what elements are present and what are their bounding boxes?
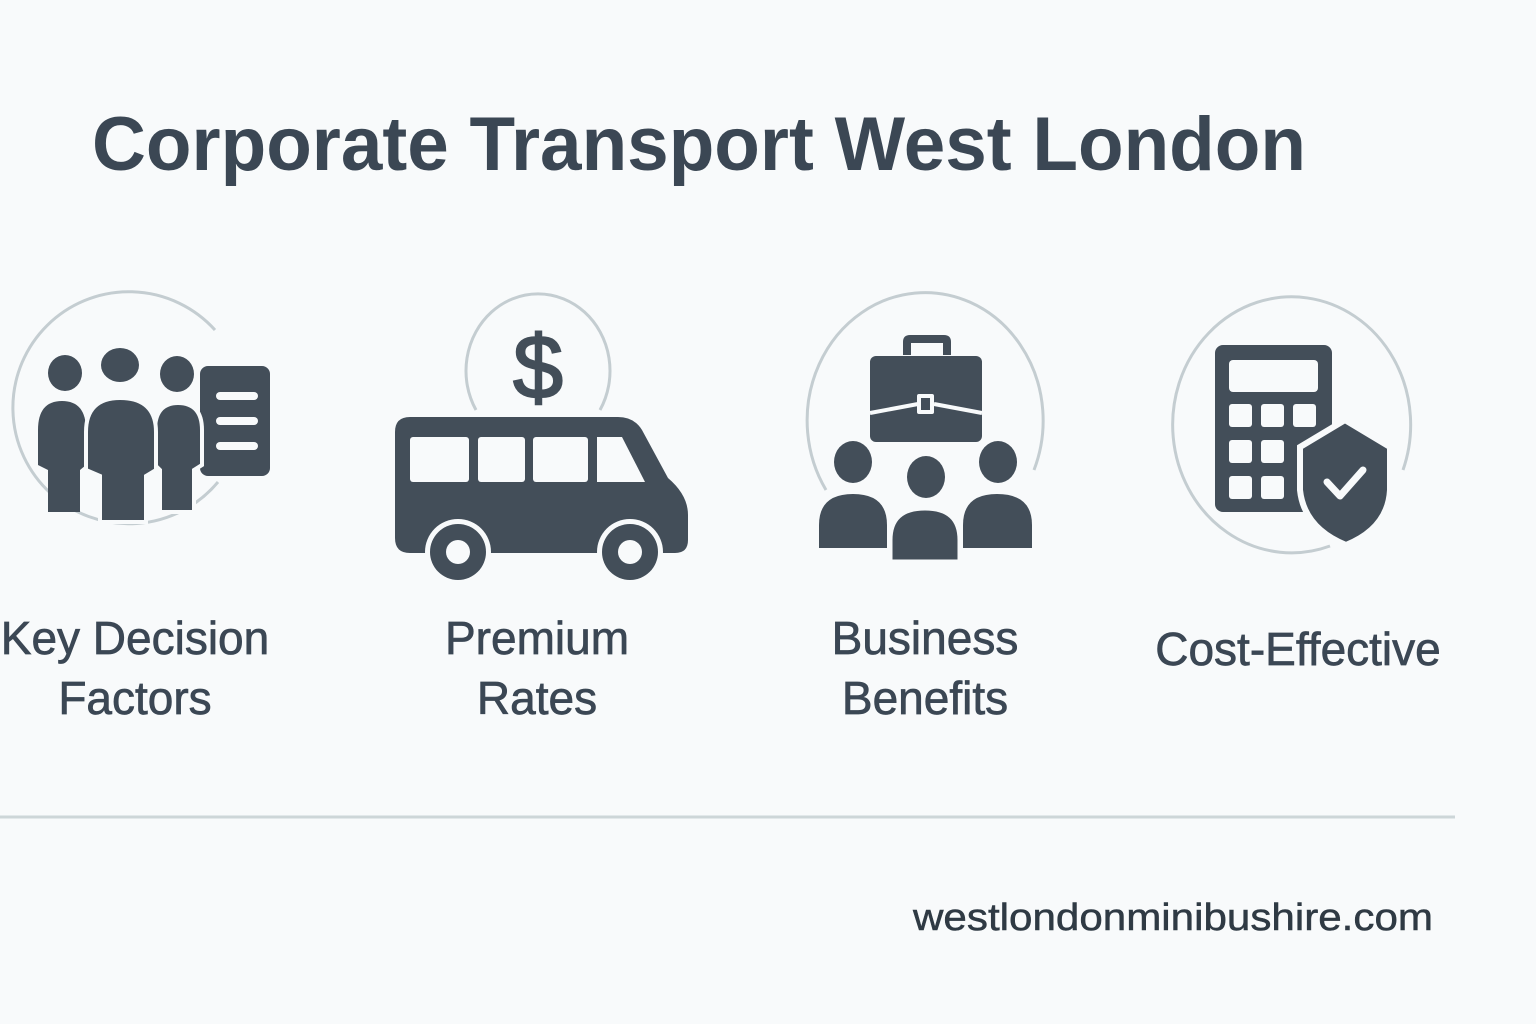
panel: cost-effective (1155, 297, 1441, 675)
label: business benefits: Business (832, 612, 1018, 664)
icon: briefcase with people (807, 293, 1043, 562)
icon: van with dollar: $ (513, 318, 563, 418)
label: key decision factors: Factors (58, 672, 212, 724)
panel: business benefits (807, 293, 1043, 724)
panel: key decision factors (1, 292, 270, 724)
label: key decision factors: Key Decision (1, 612, 269, 664)
label: premium rates: Rates (477, 672, 597, 724)
website url: westlondonminibushire.com (912, 897, 1433, 939)
icon: team with document (13, 292, 270, 524)
label: premium rates: Premium (445, 612, 629, 664)
title: Corporate Transport West London (92, 102, 1306, 187)
label: business benefits: Benefits (842, 672, 1008, 724)
icon: calculator with shield (1173, 297, 1411, 553)
label: cost-effective: Cost-Effective (1155, 623, 1441, 675)
icon: van with dollar (395, 294, 688, 585)
panel: premium rates (395, 294, 688, 724)
